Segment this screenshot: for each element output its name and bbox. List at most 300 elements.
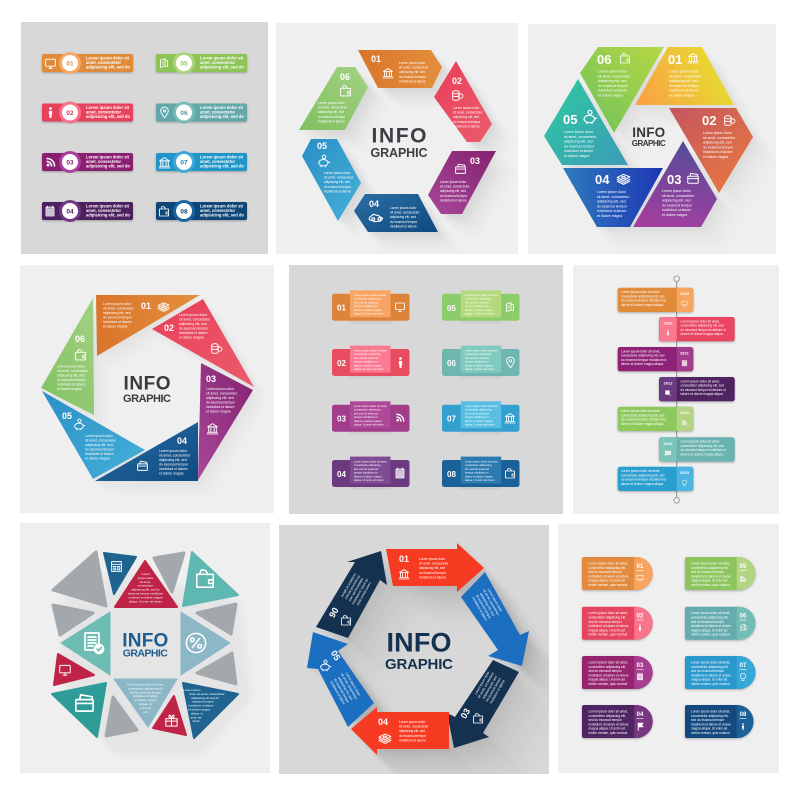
milestone 2015 bbox=[618, 467, 693, 491]
segment 05: incididunt ut labore bbox=[324, 189, 351, 193]
segment 06: Lorem ipsum dolor bbox=[57, 364, 86, 368]
milestone 2009 bbox=[618, 288, 693, 312]
panel: vertical timeline bbox=[573, 265, 779, 514]
arrow 06: do eiusmod tempor bbox=[343, 575, 361, 601]
card 01: minim veniam, quis nostrud bbox=[588, 583, 628, 587]
light blue text triangle bbox=[114, 679, 177, 727]
segment 03: adipiscing elit, sed bbox=[440, 189, 466, 193]
segment 04 bbox=[354, 194, 438, 232]
milestone 2013 bbox=[618, 407, 693, 431]
red text triangle: sit amet, bbox=[140, 580, 151, 584]
bar 04: 04 bbox=[66, 208, 74, 216]
milestone 2015: Lorem ipsum dolor sit amet, bbox=[621, 469, 660, 473]
segment 06: Lorem ipsum dolor bbox=[598, 70, 628, 74]
card 02: Lorem ipsum dolor sit amet, bbox=[354, 348, 387, 352]
segment 06: 06 bbox=[597, 52, 611, 67]
segment 06: sit amet, consectetur bbox=[57, 369, 89, 373]
segment 01: adipiscing elit, sed bbox=[103, 311, 131, 315]
segment 05 bbox=[544, 79, 628, 165]
segment 03: incididunt ut labore bbox=[206, 405, 235, 409]
segment 06: sit amet, consectetur bbox=[598, 74, 631, 78]
segment 01: adipiscing elit, sed bbox=[669, 79, 698, 83]
bar 06: 06 bbox=[180, 110, 188, 117]
card 01 bbox=[582, 557, 653, 590]
card 01: incididunt ut labore et dolore bbox=[588, 574, 629, 578]
arrow 06 bbox=[316, 551, 387, 638]
bar 07: Lorem ipsum dolor sit bbox=[200, 154, 244, 160]
card 04 bbox=[582, 705, 653, 738]
bar 07: adipisicing elit, sed do bbox=[200, 163, 244, 168]
segment 06: incididunt ut labore bbox=[57, 382, 86, 386]
segment 06: adipiscing elit, sed bbox=[598, 79, 627, 83]
segment 05: Lorem ipsum dolor bbox=[324, 171, 351, 175]
card 04: Lorem ipsum dolor sit amet, bbox=[354, 460, 387, 464]
card 07: labore et dolore magna bbox=[465, 419, 493, 423]
card 04: minim veniam, quis nostrud bbox=[588, 731, 628, 735]
bar 01: adipisicing elit, sed do bbox=[86, 64, 130, 69]
card 07: magna aliqua. Ut enim ad bbox=[691, 678, 728, 682]
segment 02 bbox=[152, 299, 254, 387]
centre title: GRAPHIC bbox=[370, 146, 428, 160]
segment 04: Lorem ipsum dolor bbox=[597, 190, 627, 194]
milestone 2009: labore et dolore magna aliqua. bbox=[621, 303, 664, 307]
milestone 2010: 2010 bbox=[664, 320, 673, 326]
milestone 2015: 2015 bbox=[680, 470, 690, 475]
milestone 2014: consectetur adipiscing elit, sed bbox=[680, 444, 724, 448]
card 08: minim veniam, quis nostrud bbox=[691, 731, 730, 735]
card 04: consectetur adipiscing elit, bbox=[588, 714, 626, 718]
segment 02: incididunt ut labore bbox=[179, 331, 208, 335]
centre title: INFO bbox=[122, 631, 168, 652]
segment 04: Lorem ipsum dolor bbox=[390, 206, 417, 210]
segment 05 bbox=[42, 391, 145, 479]
panel: rounded tab cards bbox=[558, 524, 779, 773]
segment 01: 01 bbox=[141, 301, 151, 311]
bar 08: 08 bbox=[180, 208, 188, 216]
card 08: consectetur adipiscing elit, bbox=[691, 714, 728, 718]
card 06: Lorem ipsum dolor sit amet, bbox=[691, 611, 730, 615]
centre title: INFO bbox=[632, 125, 665, 140]
card 03 bbox=[332, 401, 410, 434]
segment 05: et dolore magna bbox=[564, 154, 589, 158]
segment 03 bbox=[428, 151, 496, 214]
card 05: aliqua. Ut enim ad minim bbox=[465, 312, 495, 316]
card 07: 07 bbox=[740, 663, 747, 669]
milestone 2015: do eiusmod tempor incididunt ut bbox=[621, 478, 666, 482]
segment 03: adipiscing elit, sed bbox=[662, 199, 691, 203]
centre title: INFO bbox=[124, 374, 170, 394]
bar 01: amet, consectetur bbox=[86, 60, 121, 65]
segment 01: et dolore magna bbox=[103, 324, 128, 328]
centre title bbox=[370, 125, 428, 160]
segment 03: 03 bbox=[206, 374, 216, 384]
card 06: labore et dolore magna bbox=[465, 363, 493, 367]
arrow 03 bbox=[447, 660, 519, 748]
card 05 bbox=[685, 557, 756, 590]
segment 06: adipiscing elit, sed bbox=[318, 110, 344, 114]
card 02: consectetur adipiscing elit, bbox=[588, 616, 626, 620]
arrow 03: 03 bbox=[459, 707, 472, 720]
bar 05: 05 bbox=[180, 60, 188, 68]
card 02: 02 bbox=[337, 359, 346, 368]
milestone 2010: consectetur adipiscing elit, sed bbox=[680, 324, 724, 328]
segment 06: adipiscing elit, sed bbox=[57, 374, 85, 378]
bar 02 bbox=[42, 102, 133, 124]
segment 05: sit amet, consectetur bbox=[85, 438, 117, 442]
navy text triangle: aliqua. In bbox=[191, 711, 203, 715]
segment 06: do eiusmod tempor bbox=[598, 84, 629, 88]
arrow 05: sit amet, consectetur bbox=[340, 672, 359, 701]
card 03: aliqua. Ut enim ad minim bbox=[354, 422, 384, 426]
segment 02: 02 bbox=[702, 113, 716, 128]
bar 02: Lorem ipsum dolor sit bbox=[86, 105, 130, 110]
card 08: aliqua. Ut enim ad minim bbox=[465, 478, 495, 482]
arrow 03: adipiscing elit, sed bbox=[481, 675, 498, 700]
milestone 2013: consectetur adipiscing elit, sed bbox=[621, 413, 665, 417]
card 04: tempor incididunt ut bbox=[354, 471, 378, 475]
card 06: 06 bbox=[740, 614, 747, 620]
card 04: labore et dolore magna bbox=[354, 474, 382, 478]
centre title: INFO bbox=[372, 125, 426, 148]
milestone 2009: consectetur adipiscing elit, sed bbox=[621, 294, 665, 298]
milestone 2009: Lorem ipsum dolor sit amet, bbox=[621, 290, 660, 294]
segment 03: incididunt ut labore bbox=[440, 198, 467, 202]
segment 02: 02 bbox=[164, 323, 174, 333]
segment 02: sit amet, consectetur bbox=[179, 318, 211, 322]
card 04: consectetur adipiscing bbox=[354, 463, 381, 467]
segment 04: Lorem ipsum dolor bbox=[159, 449, 188, 453]
segment 01: sit amet, consectetur bbox=[103, 306, 135, 310]
bar 05: Lorem ipsum dolor sit bbox=[200, 56, 244, 60]
mint document triangle bbox=[61, 612, 110, 675]
segment 04: incididunt ut labore bbox=[597, 209, 626, 213]
arrow 04: sit amet, consectetur bbox=[399, 725, 429, 729]
bar 08: Lorem ipsum dolor sit bbox=[200, 204, 244, 208]
card 07: aliqua. Ut enim ad minim bbox=[465, 422, 495, 426]
segment 04: adipiscing elit, sed bbox=[159, 458, 187, 462]
bar 03: 03 bbox=[66, 160, 74, 166]
segment 01 bbox=[635, 47, 734, 105]
card 05: 05 bbox=[447, 304, 456, 313]
milestone 2011: 2011 bbox=[680, 350, 690, 356]
segment 03: Lorem ipsum dolor bbox=[206, 387, 235, 391]
segment 02: do eiusmod tempor bbox=[453, 120, 481, 124]
card 05: sed do eiusmod tempor bbox=[691, 570, 725, 574]
navy text triangle: incididunt ut labore bbox=[188, 704, 214, 708]
bar 03: Lorem ipsum dolor sit bbox=[86, 154, 130, 160]
arrow 04: 04 bbox=[378, 717, 388, 727]
arrow 05: adipiscing elit, sed bbox=[337, 676, 354, 701]
segment 02 bbox=[669, 108, 753, 193]
bar 04: adipisicing elit, sed do bbox=[86, 212, 130, 217]
segment 06: incididunt ut labore bbox=[318, 119, 345, 123]
card 07 bbox=[685, 656, 756, 689]
segment 06: 06 bbox=[340, 72, 350, 82]
card 03: elit, sed do eiusmod bbox=[354, 411, 378, 415]
red text triangle: ut labore et dolore magna bbox=[128, 595, 163, 599]
panel: six circular arrows bbox=[279, 525, 549, 774]
segment 06: 06 bbox=[75, 334, 85, 344]
card 04: magna aliqua. Ut enim ad bbox=[588, 727, 625, 731]
arrow 01 bbox=[386, 543, 484, 592]
centre title: GRAPHIC bbox=[123, 648, 168, 660]
card 03: consectetur adipiscing bbox=[354, 408, 381, 412]
segment 01: incididunt ut labore bbox=[103, 320, 132, 324]
card 08: incididunt ut labore et dolore bbox=[691, 722, 731, 726]
bar 06: Lorem ipsum dolor sit bbox=[200, 105, 244, 110]
panel: circle-number label bars bbox=[21, 22, 268, 254]
segment 04 bbox=[95, 422, 198, 481]
card 01: magna aliqua. Ut enim ad bbox=[588, 579, 625, 583]
segment 03: et dolore magna bbox=[206, 410, 231, 414]
segment 04: sit amet, consectetur bbox=[597, 195, 630, 199]
card 06: incididunt ut labore et dolore bbox=[691, 624, 731, 628]
light blue text triangle: sed do eiusmod tempor bbox=[130, 690, 161, 694]
milestone 2012: Lorem ipsum dolor sit amet, bbox=[680, 379, 720, 383]
segment 02: et dolore magna bbox=[703, 155, 728, 159]
segment 02: et dolore magna bbox=[179, 336, 204, 340]
centre title bbox=[632, 125, 666, 148]
segment 01: Lorem ipsum dolor bbox=[669, 70, 699, 74]
arrow 06: sit amet, consectetur bbox=[351, 578, 369, 606]
teal card triangle bbox=[52, 683, 106, 737]
card 05: labore et dolore magna bbox=[465, 308, 493, 312]
bar 01 bbox=[42, 52, 133, 74]
red monitor triangle bbox=[54, 654, 94, 685]
red gift triangle bbox=[153, 696, 186, 735]
card 08 bbox=[442, 457, 520, 489]
segment 05: Lorem ipsum dolor bbox=[564, 130, 594, 134]
arrow 03: sit amet, consectetur bbox=[477, 671, 495, 699]
red text triangle: adipiscing elit, sed do bbox=[131, 588, 160, 592]
segment 03 bbox=[633, 141, 717, 227]
arrow 05: 05 bbox=[329, 649, 342, 662]
card 05: minim veniam, quis nostrud bbox=[691, 583, 730, 587]
card 03: 03 bbox=[337, 414, 346, 424]
card 06: Lorem ipsum dolor sit amet, bbox=[465, 348, 498, 352]
card 07: 07 bbox=[447, 414, 456, 424]
segment 06 bbox=[41, 298, 94, 415]
card 08: 08 bbox=[447, 470, 456, 479]
milestone 2013: 2013 bbox=[680, 410, 690, 415]
segment 05: incididunt ut labore bbox=[85, 452, 114, 456]
milestone 2013: do eiusmod tempor incididunt ut bbox=[621, 418, 666, 422]
card 08: Lorem ipsum dolor sit amet, bbox=[691, 710, 730, 714]
card 03: sed do eiusmod tempor bbox=[588, 669, 623, 673]
segment 03: Lorem ipsum dolor bbox=[440, 180, 467, 184]
card 07: sed do eiusmod tempor bbox=[691, 669, 725, 673]
navy text triangle: minim bbox=[192, 719, 201, 723]
bar 07: 07 bbox=[180, 160, 188, 166]
card 01: Lorem ipsum dolor sit amet, bbox=[588, 562, 628, 566]
segment 03: incididunt ut labore bbox=[662, 208, 691, 212]
segment 01: sit amet, consectetur bbox=[669, 74, 702, 78]
segment 05: do eiusmod tempor bbox=[324, 185, 352, 189]
arrow 02: incididunt ut labore bbox=[471, 596, 488, 622]
segment 02 bbox=[434, 61, 492, 142]
arrow 02 bbox=[461, 572, 529, 666]
segment 02: sit amet, consectetur bbox=[453, 111, 483, 115]
segment 03: sit amet, consectetur bbox=[662, 194, 695, 198]
card 05: consectetur adipiscing bbox=[465, 297, 492, 301]
card 06: elit, sed do eiusmod bbox=[465, 356, 489, 360]
segment 02: Lorem ipsum dolor bbox=[453, 106, 480, 110]
centre title bbox=[385, 628, 453, 673]
segment 04 bbox=[563, 168, 663, 227]
segment 03: do eiusmod tempor bbox=[206, 400, 236, 404]
segment 03 bbox=[198, 363, 253, 480]
red text triangle: aliqua. Ut enim ad minim bbox=[129, 599, 163, 603]
segment 02: adipiscing elit, sed bbox=[453, 115, 479, 119]
card 08: sed do eiusmod tempor bbox=[691, 718, 725, 722]
milestone 2010: do eiusmod tempor incididunt ut bbox=[680, 328, 726, 332]
card 02: tempor incididunt ut bbox=[354, 360, 378, 364]
arrow 06: 06 bbox=[327, 606, 340, 619]
card 04: aliqua. Ut enim ad minim bbox=[354, 478, 384, 482]
segment 03: 03 bbox=[667, 172, 681, 187]
card 07: minim veniam, quis nostrud bbox=[691, 682, 730, 686]
segment 03: do eiusmod tempor bbox=[662, 203, 693, 207]
milestone 2012 bbox=[659, 377, 735, 401]
segment 05: adipiscing elit, sed bbox=[85, 443, 113, 447]
card 03: incididunt ut labore et dolore bbox=[588, 673, 629, 677]
bar 01: Lorem ipsum dolor sit bbox=[86, 56, 130, 60]
segment 01: do eiusmod tempor bbox=[399, 75, 427, 79]
bar 08: amet, consectetur bbox=[200, 208, 235, 213]
card 05: magna aliqua. Ut enim ad bbox=[691, 579, 728, 583]
segment 04: et dolore magna bbox=[159, 472, 184, 476]
card 06: aliqua. Ut enim ad minim bbox=[465, 367, 495, 371]
arrow 04: Lorem ipsum dolor bbox=[399, 720, 426, 724]
segment 02: incididunt ut labore bbox=[453, 124, 480, 128]
card 01: consectetur adipiscing bbox=[354, 297, 381, 301]
segment 05: 05 bbox=[317, 141, 327, 151]
bar 08 bbox=[156, 200, 247, 222]
card 03: tempor incididunt ut bbox=[354, 415, 378, 419]
milestone 2013: Lorem ipsum dolor sit amet, bbox=[621, 409, 660, 413]
navy text triangle: dolor sit amet, consectetur bbox=[189, 692, 225, 696]
light blue text triangle: Lorem ipsum dolor sit amet, bbox=[127, 682, 164, 686]
bar 03: amet, consectetur bbox=[86, 159, 121, 164]
panel: folded tab cards bbox=[289, 265, 563, 514]
navy text triangle bbox=[183, 683, 238, 738]
card 01: consectetur adipiscing elit, bbox=[588, 566, 626, 570]
light blue text triangle: et dolore magna bbox=[135, 698, 157, 702]
milestone 2010 bbox=[659, 317, 735, 341]
segment 03: adipiscing elit, sed bbox=[206, 396, 234, 400]
arrow 01: sit amet, consectetur bbox=[419, 562, 449, 566]
card 03: labore et dolore magna bbox=[354, 419, 382, 423]
milestone 2010: Lorem ipsum dolor sit amet, bbox=[680, 319, 720, 323]
arrow 04: do eiusmod tempor bbox=[399, 734, 427, 738]
card 06 bbox=[685, 607, 756, 640]
bar 03 bbox=[42, 151, 133, 173]
segment 05: 05 bbox=[563, 112, 577, 127]
bar 02: 02 bbox=[66, 110, 74, 117]
segment 06: do eiusmod tempor bbox=[57, 378, 87, 382]
light blue text triangle: incididunt ut labore bbox=[133, 694, 158, 698]
navy text triangle: Lorem ipsum bbox=[183, 688, 201, 692]
segment 04: incididunt ut labore bbox=[159, 467, 188, 471]
card 01: aliqua. Ut enim ad minim bbox=[354, 312, 384, 316]
segment 01: 01 bbox=[668, 52, 682, 67]
card 06 bbox=[442, 346, 520, 378]
panel: hexagon ring of six chevrons bbox=[276, 23, 518, 254]
segment 03: et dolore magna bbox=[662, 213, 687, 217]
milestone 2009: do eiusmod tempor incididunt ut bbox=[621, 299, 666, 303]
bar 05 bbox=[156, 52, 247, 74]
red text triangle: Lorem bbox=[141, 572, 150, 576]
card 04: elit, sed do eiusmod bbox=[354, 467, 378, 471]
milestone 2014: labore et dolore magna aliqua. bbox=[680, 452, 724, 456]
card 08 bbox=[685, 705, 754, 738]
arrow 06: adipiscing elit, sed bbox=[348, 577, 365, 602]
arrow 05: Lorem ipsum dolor bbox=[345, 672, 362, 697]
segment 05: adipiscing elit, sed bbox=[324, 180, 350, 184]
bar 02: adipisicing elit, sed do bbox=[86, 114, 130, 119]
arrow 02: adipiscing elit, sed bbox=[479, 592, 496, 617]
arrow 05: incididunt ut labore bbox=[329, 680, 346, 706]
segment 05: do eiusmod tempor bbox=[564, 144, 595, 148]
card 05: Lorem ipsum dolor sit amet, bbox=[465, 293, 498, 297]
arrow 06: incididunt ut labore bbox=[340, 573, 357, 598]
card 07: consectetur adipiscing elit, bbox=[691, 665, 728, 669]
card 05 bbox=[442, 290, 520, 323]
segment 04: et dolore magna bbox=[597, 214, 622, 218]
milestone 2011 bbox=[618, 347, 693, 371]
light blue text triangle: consectetur adipiscing elit, bbox=[128, 686, 163, 690]
navy icon triangle bbox=[104, 553, 136, 594]
card 05: consectetur adipiscing elit, bbox=[691, 566, 728, 570]
card 06: tempor incididunt ut bbox=[465, 360, 489, 364]
arrow 01: incididunt ut labore bbox=[419, 575, 446, 579]
segment 01: Lorem ipsum dolor bbox=[399, 61, 426, 65]
card 03: minim veniam, quis nostrud bbox=[588, 682, 628, 686]
card 04: 04 bbox=[637, 712, 644, 718]
card 01: 01 bbox=[637, 564, 644, 570]
teal wallet triangle bbox=[183, 552, 238, 606]
card 01: Lorem ipsum dolor sit amet, bbox=[354, 293, 387, 297]
arrow 04: adipiscing elit, sed bbox=[399, 729, 425, 733]
card 02: 02 bbox=[637, 614, 644, 620]
segment 03: Lorem ipsum dolor bbox=[662, 189, 692, 193]
segment 05: sit amet, consectetur bbox=[564, 135, 597, 139]
card 02: aliqua. Ut enim ad minim bbox=[354, 367, 384, 371]
segment 01: incididunt ut labore bbox=[669, 89, 698, 93]
segment 01: incididunt ut labore bbox=[399, 79, 426, 83]
arrow 01: do eiusmod tempor bbox=[419, 571, 447, 575]
segment 05: 05 bbox=[62, 411, 72, 421]
panel: faceted octagon of triangles bbox=[20, 523, 270, 773]
card 05: tempor incididunt ut bbox=[465, 304, 489, 308]
card 07: incididunt ut labore et dolore bbox=[691, 673, 731, 677]
arrow 03: Lorem ipsum dolor bbox=[474, 670, 491, 695]
arrow 05 bbox=[307, 632, 374, 727]
segment 01: sit amet, consectetur bbox=[399, 66, 429, 70]
card 02: Lorem ipsum dolor sit amet, bbox=[588, 611, 628, 615]
segment 06 bbox=[580, 47, 664, 133]
card 07: consectetur adipiscing bbox=[465, 408, 492, 412]
segment 04: sit amet, consectetur bbox=[390, 211, 420, 215]
card 06: magna aliqua. Ut enim ad bbox=[691, 628, 728, 632]
milestone 2011: labore et dolore magna aliqua. bbox=[621, 362, 664, 366]
panel: pinwheel hexagon of triangles bbox=[20, 265, 274, 513]
bar 06: adipisicing elit, sed do bbox=[200, 114, 244, 119]
navy text triangle: enim ad bbox=[191, 715, 202, 719]
segment 05: sit amet, consectetur bbox=[324, 176, 354, 180]
arrow 03: do eiusmod tempor bbox=[485, 676, 503, 702]
milestone 2012: labore et dolore magna aliqua. bbox=[680, 392, 724, 396]
